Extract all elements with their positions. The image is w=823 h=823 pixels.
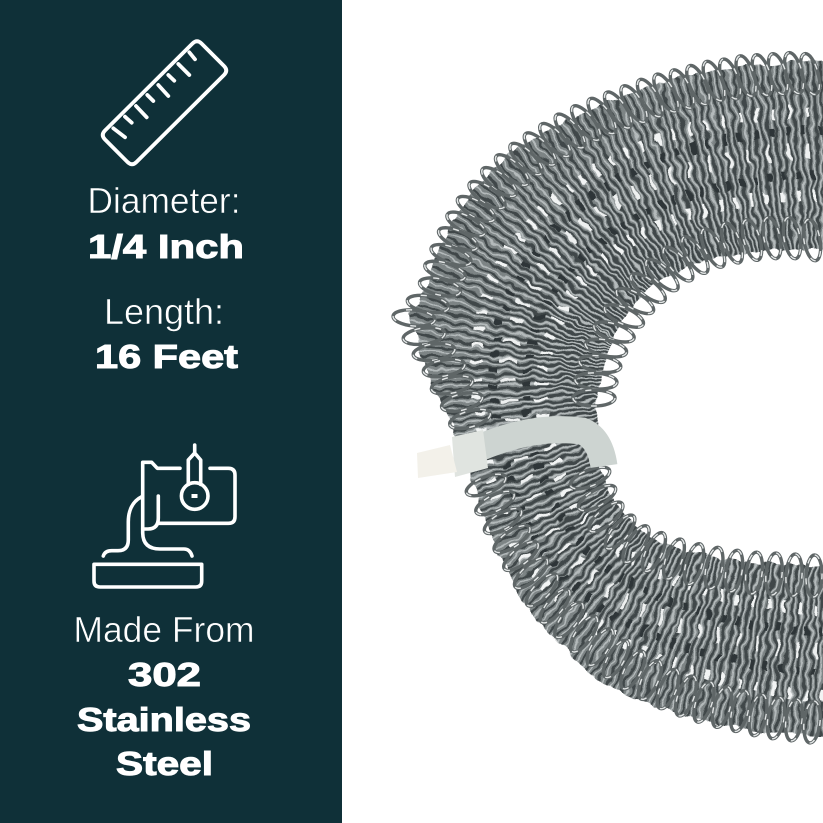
value: 1/4 inch: 1/4 Inch [88, 228, 244, 265]
icon: ruler [103, 41, 226, 164]
label: diameter: Diameter: [88, 180, 240, 221]
panel: specifications [0, 0, 342, 823]
coil loops: top arc [392, 51, 823, 328]
value: 302: 302 [128, 656, 201, 693]
value: steel: Steel [116, 745, 213, 782]
coil loops: left and lower arc [402, 325, 822, 744]
value: stainless: Stainless [77, 701, 251, 738]
value: 16 feet: 16 Feet [95, 338, 238, 375]
label: length: Length: [104, 291, 224, 332]
photo: stainless steel coil [380, 40, 823, 760]
icon: melting machine [94, 445, 235, 587]
cable tie [417, 430, 604, 478]
label: made from: Made From [74, 609, 254, 650]
coil loops: inner edge [568, 216, 823, 597]
